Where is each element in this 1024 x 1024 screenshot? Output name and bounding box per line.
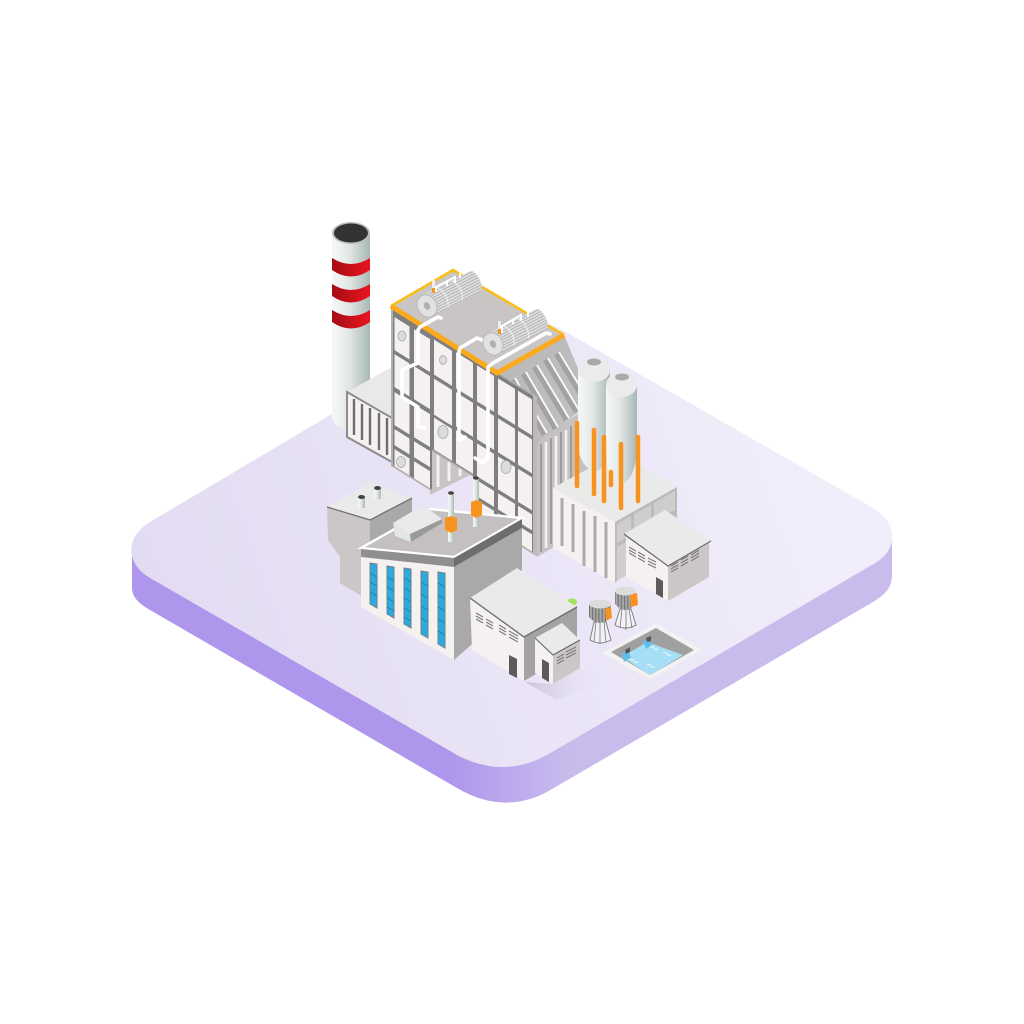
stack opening (332, 222, 370, 244)
steam drum 2 (479, 307, 551, 359)
side box (605, 607, 612, 620)
right wall (454, 528, 522, 660)
exhaust stack 2 (471, 476, 482, 527)
roof box (393, 505, 442, 542)
steam drum 1 (413, 269, 485, 321)
shed shadow (525, 668, 603, 700)
boiler tower (391, 269, 592, 557)
orange pipes (577, 423, 638, 508)
exhaust stack 1 (445, 491, 457, 542)
platform top (131, 318, 892, 767)
roof (391, 270, 564, 373)
roof (361, 509, 522, 557)
door (542, 659, 549, 682)
windows (370, 563, 445, 648)
right side wall (537, 405, 592, 557)
water (622, 642, 683, 675)
front shed annex (535, 623, 580, 684)
platform side (132, 537, 892, 803)
roof vents (358, 486, 381, 508)
silo base block (553, 453, 677, 583)
hopper (497, 335, 592, 443)
left wall (361, 557, 454, 660)
vents (557, 647, 576, 664)
right wall (615, 487, 677, 583)
side box (630, 593, 638, 607)
vents (629, 547, 699, 572)
parapet (361, 549, 454, 567)
right storage shed (624, 510, 711, 601)
recessed support wall (430, 420, 480, 495)
front facade grid (391, 306, 537, 557)
cooling tower 2 (615, 586, 638, 630)
main front building (361, 476, 522, 660)
ripples (630, 647, 671, 667)
door (656, 577, 663, 598)
sluice gates (622, 636, 652, 662)
smokestack (332, 222, 370, 430)
left wall (553, 488, 615, 583)
window muntins (370, 573, 445, 635)
rear annex building (347, 367, 400, 462)
water basin (603, 623, 702, 680)
vents (476, 613, 518, 642)
front shed (470, 568, 577, 681)
silo pair (578, 358, 637, 484)
green marker (567, 598, 577, 606)
roof pipes (402, 317, 550, 463)
door (509, 655, 517, 678)
red bands (332, 258, 370, 328)
panel portholes (396, 331, 511, 474)
left utility block (327, 483, 412, 605)
cooling tower 1 (589, 600, 612, 644)
